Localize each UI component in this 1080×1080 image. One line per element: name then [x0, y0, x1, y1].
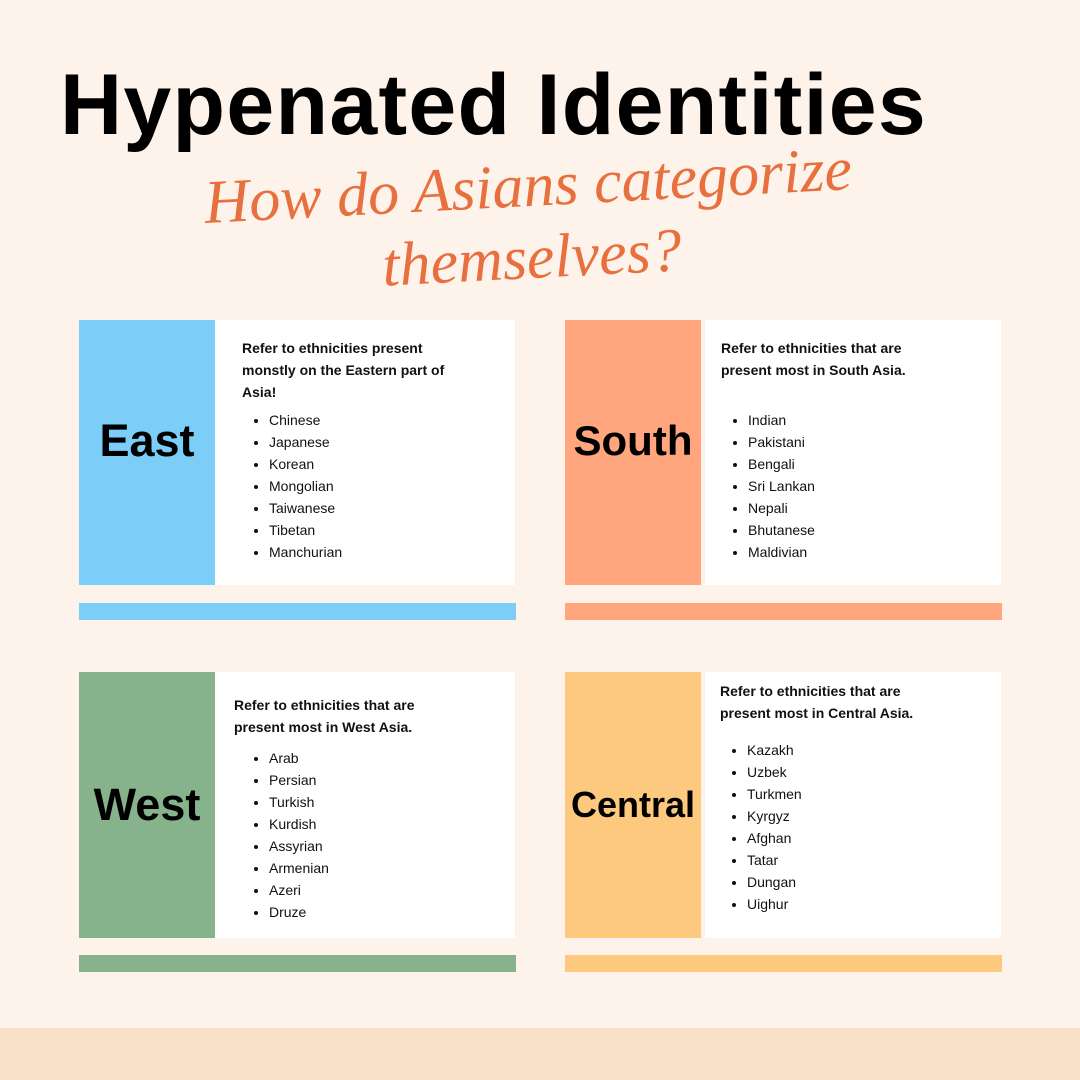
- card: South: Bengali: [748, 456, 795, 472]
- card: Central: [705, 672, 1001, 938]
- bottom band: [0, 1028, 1080, 1080]
- title: Hypenated Identities: [60, 57, 927, 153]
- card: South: Pakistani: [748, 434, 805, 450]
- panel: East: [79, 320, 516, 620]
- card: East: Chinese: [269, 412, 320, 428]
- label: Central: [565, 672, 701, 938]
- label: Central: Central: [571, 784, 695, 825]
- card: West: Kurdish: [269, 816, 316, 832]
- card: South: [705, 320, 1001, 585]
- card: East: Japanese: [269, 434, 330, 450]
- card: West: Persian: [269, 772, 316, 788]
- card: South: Indian: [748, 412, 786, 428]
- card: West: Armenian: [269, 860, 329, 876]
- card: Central: Dungan: [747, 874, 796, 890]
- card: Central: Uzbek: [747, 764, 787, 780]
- card: East: Taiwanese: [269, 500, 335, 516]
- card: East: Tibetan: [269, 522, 315, 538]
- card: Central: Turkmen: [747, 786, 802, 802]
- subtitle: [203, 135, 854, 300]
- subtitle: How do Asians categorize: [203, 135, 854, 237]
- card: East: Manchurian: [269, 544, 342, 560]
- card: East: Korean: [269, 456, 314, 472]
- label: South: South: [574, 416, 692, 464]
- card: Central: Refer to ethnicities that are present most in Central Asia.: [720, 683, 913, 721]
- card: West: [215, 672, 515, 938]
- card: West: Turkish: [269, 794, 314, 810]
- card: East: Refer to ethnicities present monstly on the Eastern part of Asia!: [242, 340, 444, 400]
- card: East: Mongolian: [269, 478, 334, 494]
- card: South: Refer to ethnicities that are present most in South Asia.: [721, 340, 906, 378]
- panel: South: [565, 320, 1002, 620]
- label: West: West: [94, 779, 200, 830]
- label: East: [79, 320, 215, 585]
- card: West: Druze: [269, 904, 306, 920]
- card: Central: Kazakh: [747, 742, 794, 758]
- panel: Central: [565, 672, 1002, 972]
- card: South: Nepali: [748, 500, 788, 516]
- label: East: East: [99, 414, 195, 466]
- card: West: Arab: [269, 750, 299, 766]
- card: Central: Afghan: [747, 830, 791, 846]
- card: South: Bhutanese: [748, 522, 815, 538]
- subtitle: themselves?: [381, 216, 683, 300]
- card: Central: Tatar: [747, 852, 778, 868]
- card: West: Refer to ethnicities that are present most in West Asia.: [234, 697, 414, 735]
- card: East: [215, 320, 515, 585]
- card: West: Azeri: [269, 882, 301, 898]
- label: West: [79, 672, 215, 938]
- label: South: [565, 320, 701, 585]
- panel: West: [79, 672, 516, 972]
- card: Central: Uighur: [747, 896, 788, 912]
- card: South: Sri Lankan: [748, 478, 815, 494]
- card: South: Maldivian: [748, 544, 807, 560]
- card: West: Assyrian: [269, 838, 323, 854]
- card: Central: Kyrgyz: [747, 808, 790, 824]
